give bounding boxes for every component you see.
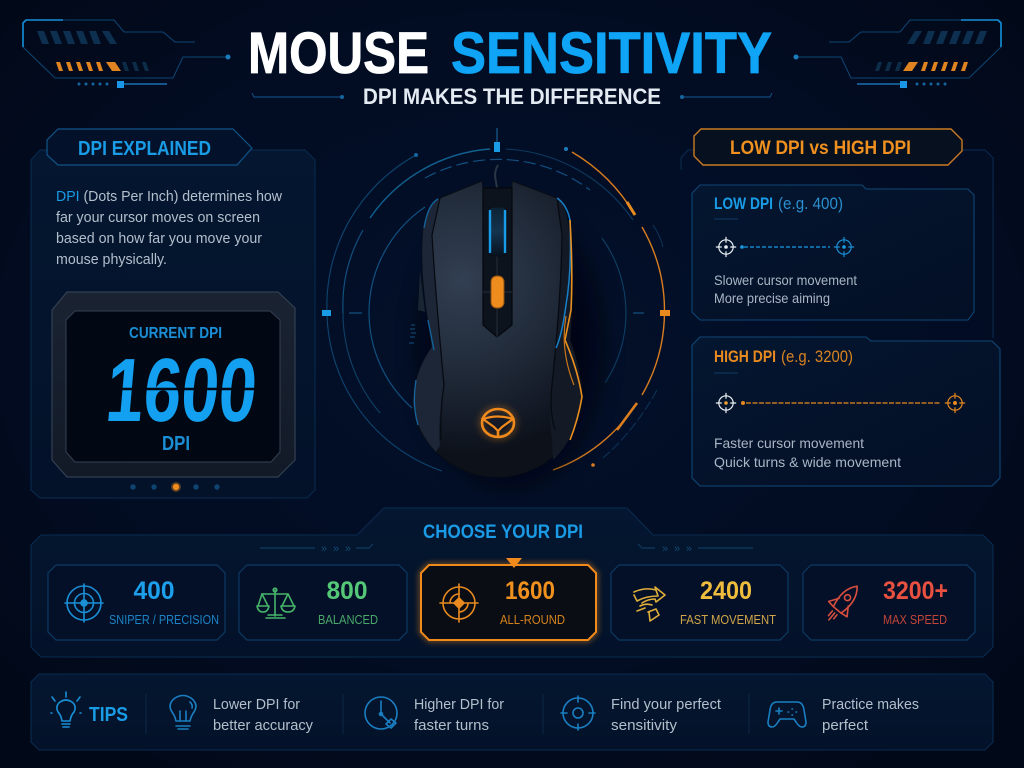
title: MOUSE [248,21,429,86]
card: low DPI: LOW DPI [714,195,773,213]
tips heading: TIPS [89,704,128,726]
card: low DPI: More precise aiming [714,290,830,306]
card: high DPI: HIGH DPI [714,348,776,366]
card: high DPI [692,337,1000,486]
tip: sensitivity [561,696,722,734]
card: 800: BALANCED [318,612,378,627]
card: low DPI: (e.g. 400) [778,195,843,213]
tip: turns [365,696,504,734]
card: high DPI: Quick turns & wide movement [714,454,901,470]
panel: choose your DPI: »»» [321,543,351,555]
card: low DPI: Slower cursor movement [714,272,857,288]
side button glyphs [409,325,416,343]
title [248,21,772,86]
icon: bulb [170,696,196,729]
card: 2400: 2400 [700,577,752,605]
readout: 1600: 1600 [102,340,261,441]
text: DPI definition: mouse physically. [56,251,167,268]
subtitle [252,84,772,109]
card: 3200+: MAX SPEED [883,612,947,627]
panel: low vs high [681,129,1000,486]
icon: rocket [820,578,866,628]
DPI display: DPI [162,433,190,455]
card: 400 [48,565,225,640]
panel: tips [31,674,993,750]
card: 800: 800 [326,577,368,605]
text: DPI definition: based on how far you move your [56,230,262,247]
center channel [483,188,512,337]
logo [481,408,515,438]
indicator dots [130,482,220,492]
cursor travel: long [716,393,965,413]
icon: gamepad [768,702,806,727]
header ornament: right [794,20,1001,88]
DPI button [491,276,504,308]
tip: accuracy [170,696,313,734]
cursor travel: short [716,237,854,257]
subtitle: DPI MAKES THE DIFFERENCE [363,84,661,109]
heading: low vs high [694,129,962,165]
dial markers [322,142,670,467]
icon: target [561,696,595,730]
icon: swirl arrows [634,587,665,621]
accent lines [414,199,438,425]
tips heading [51,692,128,727]
heading: choose your DPI: CHOOSE YOUR DPI [423,521,583,543]
side panels [413,198,444,452]
tip: turns: Higher DPI for [414,696,504,713]
icon: target [440,584,478,622]
DPI display: CURRENT DPI [129,325,222,342]
card: low DPI [692,185,974,320]
text: DPI definition: far your cursor moves on screen [56,209,260,226]
marker triangle [506,558,522,568]
tip: accuracy: Lower DPI for [213,696,300,713]
card: 400: 400 [134,577,174,605]
panel: DPI explained [31,129,315,498]
panel: choose your DPI: »»» [662,543,692,555]
tip: practice: Practice makes [822,696,919,713]
card: 1600 selected: 1600 [505,577,555,605]
tip: practice: perfect [822,717,869,734]
heading: low vs high: LOW DPI vs HIGH DPI [730,137,911,159]
card: high DPI: (e.g. 3200) [781,348,853,366]
text: DPI definition [56,188,282,268]
heading: DPI explained [47,129,252,165]
panel: choose your DPI [31,508,993,657]
mouse [413,165,600,485]
card: 400: SNIPER / PRECISION [109,612,219,627]
title: SENSITIVITY [451,21,772,86]
scroll wheel [488,207,507,256]
card: 1600 selected: ALL-ROUND [500,612,565,627]
card: 3200+ [803,565,975,640]
icon: clock [365,697,397,729]
tip: sensitivity: sensitivity [611,717,677,734]
card: 3200+: 3200+ [883,577,948,605]
DPI display [52,292,295,477]
dial rings around mouse [327,128,665,471]
tip: accuracy: better accuracy [213,717,313,734]
tip: turns: faster turns [414,717,489,734]
icon: crosshair [65,584,103,622]
header ornament: left [23,20,230,88]
card: 800 [239,565,407,640]
text: DPI definition: DPI (Dots Per Inch) determines how [56,188,282,205]
heading: DPI explained: DPI EXPLAINED [78,138,211,160]
card: 1600 selected [421,558,596,640]
icon: scales [257,588,295,618]
card: 2400: FAST MOVEMENT [680,612,776,627]
icon: idea bulb [51,692,81,727]
tip: practice [768,696,919,734]
card: 2400 [611,565,788,640]
tip: sensitivity: Find your perfect [611,696,722,713]
card: high DPI: Faster cursor movement [714,435,864,451]
